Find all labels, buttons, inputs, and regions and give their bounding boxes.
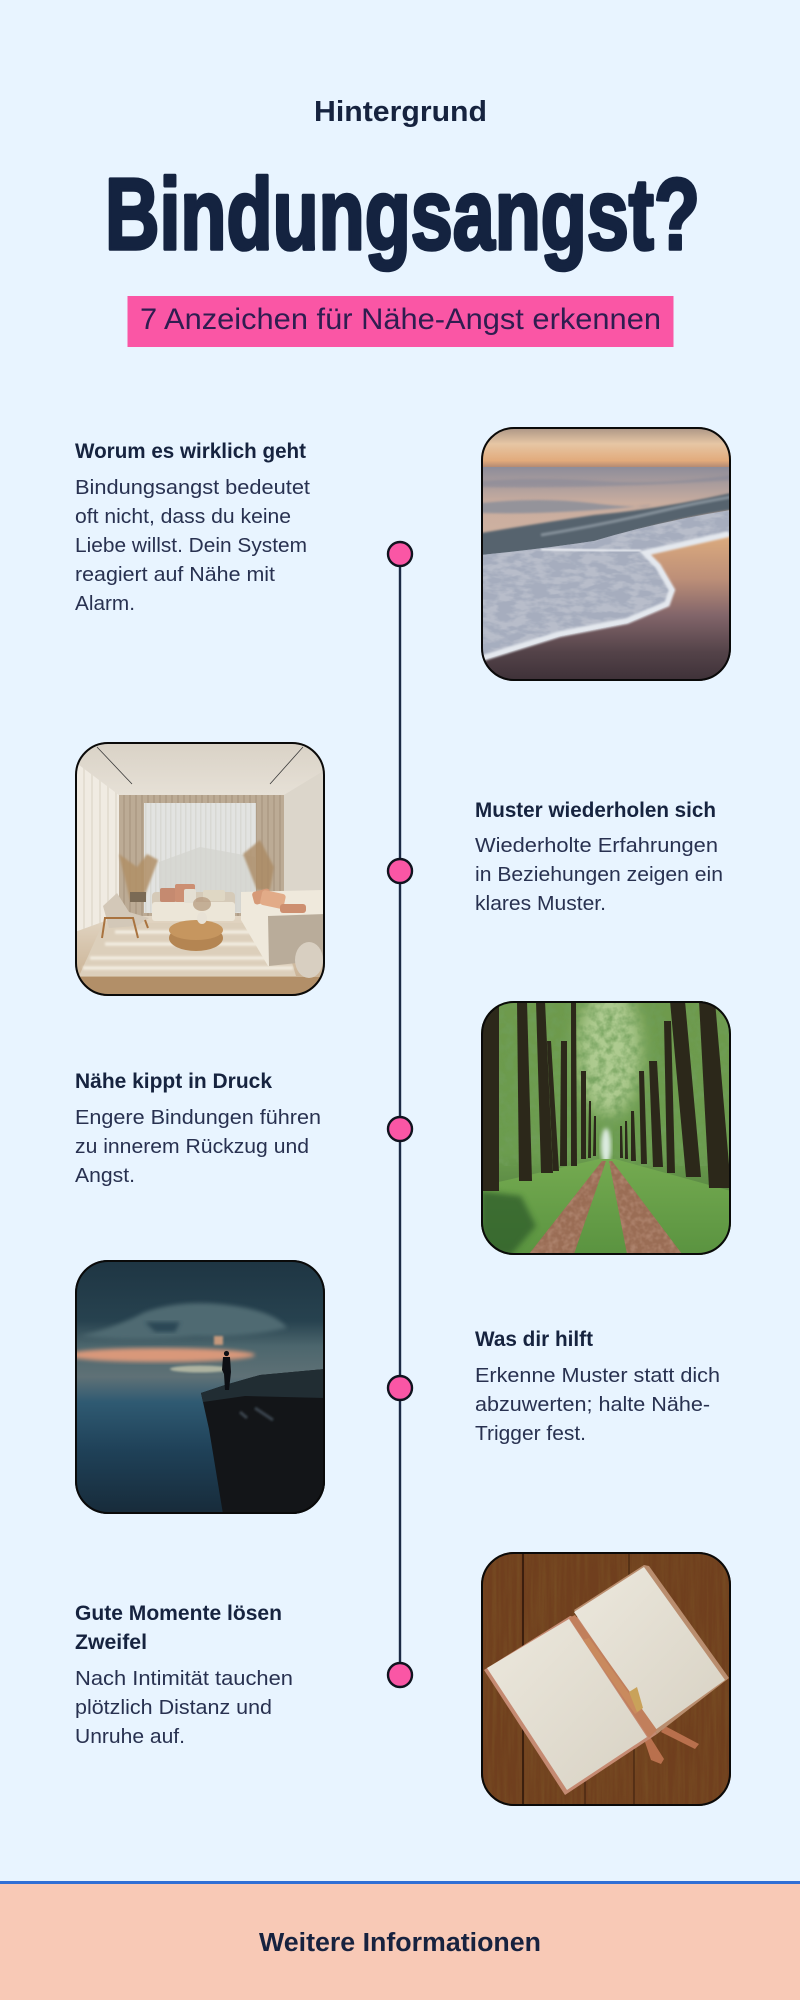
text block: Nähe kippt in Druck xyxy=(75,1070,321,1187)
person silhouette xyxy=(222,1351,231,1390)
header xyxy=(105,96,700,347)
text block: Muster wiederholen sich xyxy=(475,799,723,915)
image: open notebook on wood xyxy=(481,1552,731,1806)
text block: Was dir hilft: Erkenne Muster statt dich xyxy=(475,1364,720,1387)
subtitle banner xyxy=(128,296,674,347)
text block: Nähe kippt in Druck: Engere Bindungen führen xyxy=(75,1106,321,1129)
text block: Muster wiederholen sich: in Beziehungen zeigen ein xyxy=(475,863,723,886)
text block: Worum es wirklich geht xyxy=(75,440,310,615)
text block: Muster wiederholen sich: Muster wiederholen sich xyxy=(475,799,716,822)
text block: Nähe kippt in Druck: Nähe kippt in Druck xyxy=(75,1070,272,1093)
text block: Gute Momente lösen Zweifel: Zweifel xyxy=(75,1631,147,1654)
text block: Gute Momente lösen Zweifel: Gute Momente lösen xyxy=(75,1602,282,1625)
text block: Worum es wirklich geht: Alarm. xyxy=(75,592,135,615)
text block: Muster wiederholen sich: Wiederholte Erfahrungen xyxy=(475,834,718,857)
timeline dot 3 xyxy=(388,1117,412,1141)
text block: Worum es wirklich geht: oft nicht, dass du keine xyxy=(75,505,291,528)
text block: Was dir hilft: Trigger fest. xyxy=(475,1422,586,1445)
text block: Worum es wirklich geht: Bindungsangst bedeutet xyxy=(75,476,310,499)
eyebrow label: Hintergrund xyxy=(314,96,487,128)
text block: Nähe kippt in Druck: Angst. xyxy=(75,1164,135,1187)
footer label: Weitere Informationen xyxy=(259,1929,541,1957)
text block: Nähe kippt in Druck: zu innerem Rückzug und xyxy=(75,1135,309,1158)
timeline dot 4 xyxy=(388,1376,412,1400)
footer xyxy=(0,1881,800,2000)
text block: Gute Momente lösen Zweifel xyxy=(75,1602,293,1748)
text block: Worum es wirklich geht: reagiert auf Nähe mit xyxy=(75,563,275,586)
text block: Muster wiederholen sich: klares Muster. xyxy=(475,892,606,915)
text block: Worum es wirklich geht: Liebe willst. Dein System xyxy=(75,534,307,557)
image: forest path xyxy=(481,986,731,1255)
text block: Worum es wirklich geht: Worum es wirklich geht xyxy=(75,440,306,463)
text block: Was dir hilft: Was dir hilft xyxy=(475,1328,593,1351)
text block: Gute Momente lösen Zweifel: Unruhe auf. xyxy=(75,1725,185,1748)
timeline dot 1 xyxy=(388,542,412,566)
image: living room xyxy=(75,742,325,996)
image: figure on cliff xyxy=(65,1260,325,1514)
image: beach at sunset xyxy=(481,427,731,681)
timeline dot 5 xyxy=(388,1663,412,1687)
text block: Was dir hilft: abzuwerten; halte Nähe- xyxy=(475,1393,710,1416)
timeline dot 2 xyxy=(388,859,412,883)
text block: Gute Momente lösen Zweifel: plötzlich Distanz und xyxy=(75,1696,272,1719)
timeline xyxy=(388,542,412,1687)
text block: Gute Momente lösen Zweifel: Nach Intimität tauchen xyxy=(75,1667,293,1690)
text block: Was dir hilft xyxy=(475,1328,720,1445)
subtitle banner: 7 Anzeichen für Nähe-Angst erkennen xyxy=(140,303,661,336)
